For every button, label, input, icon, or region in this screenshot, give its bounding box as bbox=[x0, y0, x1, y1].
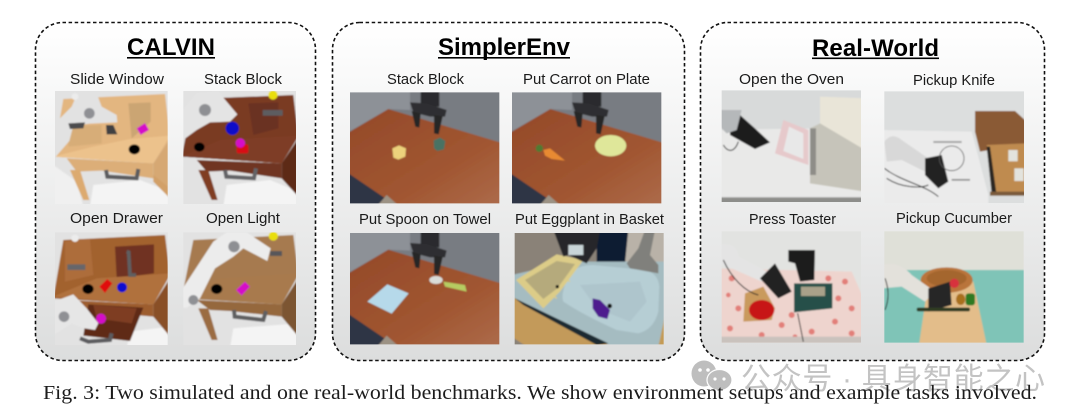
label: Put Carrot on Plate: Put Carrot on Plate bbox=[523, 71, 650, 88]
image: Open Drawer scene bbox=[53, 230, 170, 348]
image: Open Light scene bbox=[182, 230, 298, 348]
label: Open Drawer: Open Drawer bbox=[70, 210, 163, 227]
label: Put Eggplant in Basket: Put Eggplant in Basket bbox=[515, 211, 665, 228]
heading: CALVIN: CALVIN bbox=[127, 34, 215, 61]
heading underline bbox=[812, 58, 939, 59]
label: Stack Block: Stack Block bbox=[204, 71, 282, 88]
label: Press Toaster: Press Toaster bbox=[749, 211, 836, 228]
image: Open the Oven photo bbox=[718, 88, 865, 204]
label: Pickup Knife: Pickup Knife bbox=[913, 72, 995, 89]
watermark text: 公众号 · 具身智能之心 bbox=[741, 363, 1045, 396]
caption: Fig. 3: Two simulated and one real-world benchmarks. We show environment setups and example tasks involved. bbox=[43, 382, 1037, 404]
image: Stack Block table scene bbox=[350, 92, 500, 204]
image: Put Eggplant in Basket scene bbox=[512, 230, 667, 347]
label: Stack Block: Stack Block bbox=[387, 71, 464, 88]
image: Put Carrot on Plate scene bbox=[512, 92, 662, 204]
panel: Real-World bbox=[700, 22, 1044, 360]
image: Pickup Knife photo bbox=[882, 89, 1027, 206]
watermark: WeChat official account bbox=[692, 360, 1045, 396]
label: Put Spoon on Towel: Put Spoon on Towel bbox=[359, 211, 491, 228]
panel: CALVIN bbox=[36, 22, 316, 360]
heading underline bbox=[438, 57, 570, 59]
heading: Real-World: Real-World bbox=[812, 35, 939, 62]
heading: SimplerEnv: SimplerEnv bbox=[438, 34, 571, 61]
image: Slide Window scene bbox=[53, 88, 170, 207]
label: Slide Window: Slide Window bbox=[70, 71, 164, 88]
label: Open the Oven: Open the Oven bbox=[739, 71, 844, 88]
label: Pickup Cucumber: Pickup Cucumber bbox=[896, 210, 1012, 227]
image: Press Toaster photo bbox=[718, 228, 865, 345]
image: Stack Block scene bbox=[182, 88, 298, 207]
image: Pickup Cucumber photo bbox=[882, 228, 1027, 345]
panel: SimplerEnv bbox=[332, 22, 684, 360]
heading underline bbox=[127, 57, 215, 59]
icon: WeChat bubbles bbox=[692, 360, 732, 390]
image: Put Spoon on Towel scene bbox=[350, 233, 500, 344]
label: Open Light: Open Light bbox=[206, 210, 281, 227]
